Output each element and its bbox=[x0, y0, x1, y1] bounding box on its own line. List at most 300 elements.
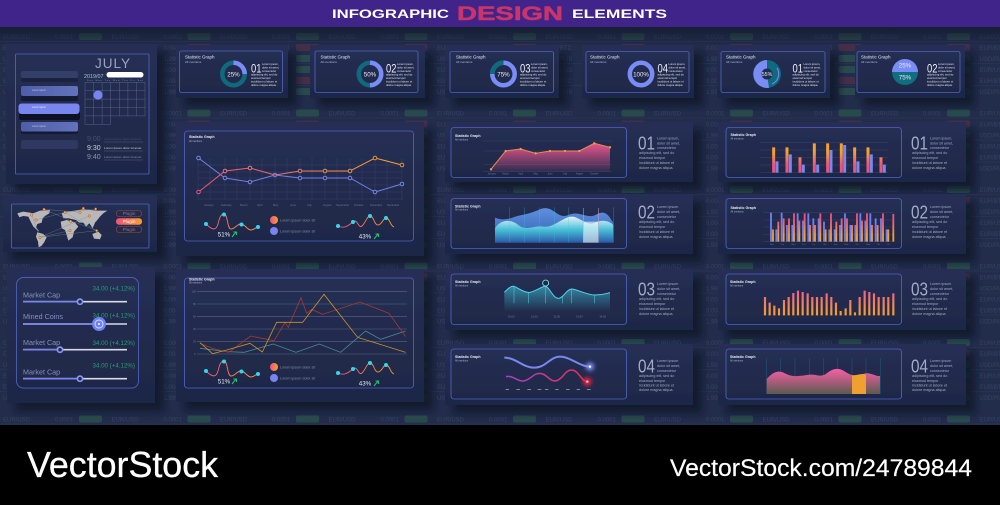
chart title bbox=[730, 280, 756, 288]
card number and copy: consectetur bbox=[397, 69, 411, 73]
panel number and copy: dolore magna aliqua. bbox=[912, 166, 946, 170]
stat card 100 percent bbox=[582, 45, 694, 98]
sparkline right bbox=[336, 214, 394, 228]
slider: mined coins bbox=[23, 312, 135, 331]
panel number and copy: adipiscing elit, sed do bbox=[639, 297, 674, 301]
panel: cyan line chart 03 bbox=[445, 269, 693, 330]
card number and copy: eiusmod tempor bbox=[386, 76, 406, 80]
calendar grid bbox=[85, 79, 145, 124]
card number and copy: 01 bbox=[792, 64, 803, 76]
panel number and copy: adipiscing elit, sed do bbox=[912, 151, 947, 155]
grid and y axis: 100 bbox=[192, 290, 196, 294]
panel number and copy: eiusmod tempor bbox=[639, 156, 666, 160]
grid and y axis: 20 bbox=[193, 340, 196, 344]
panel number and copy: eiusmod tempor bbox=[912, 156, 939, 160]
schedule times: Lorem ipsum dolor sit amet bbox=[104, 155, 141, 159]
panel number and copy: Lorem ipsum bbox=[657, 359, 678, 363]
panel number and copy: adipiscing elit, sed do bbox=[639, 220, 674, 224]
dense bars: Mon bbox=[770, 244, 774, 246]
card number and copy: consectetur bbox=[668, 69, 683, 73]
card number and copy: dolore magna aliqua. bbox=[520, 83, 546, 87]
dense bars: Tue bbox=[781, 244, 785, 246]
chart title: Statistic Graph bbox=[189, 135, 215, 139]
chart title: Statistic Graph bbox=[189, 278, 215, 282]
card number and copy: eiusmod tempor bbox=[520, 76, 540, 80]
panel number and copy: dolor sit amet, bbox=[930, 287, 953, 291]
panel number and copy: 03 bbox=[911, 280, 928, 300]
month axis labels: January bbox=[204, 203, 214, 207]
title: infographic: INFOGRAPHIC bbox=[332, 7, 449, 21]
cyan chart: 12:00 bbox=[553, 314, 560, 318]
list button 2 bbox=[21, 86, 78, 101]
percent 43 bbox=[359, 380, 378, 388]
panel: bar chart 03 bbox=[718, 269, 966, 330]
card number and copy: 01 bbox=[251, 64, 262, 76]
percent 51 bbox=[218, 378, 236, 386]
glow waves bbox=[504, 357, 594, 389]
chart title: Statistic Graph bbox=[455, 355, 481, 359]
percent 43: 43% bbox=[359, 380, 372, 388]
panel number and copy bbox=[911, 356, 953, 392]
panel number and copy: consectetur bbox=[657, 146, 677, 150]
card heading bbox=[456, 54, 486, 64]
card number and copy: 04 bbox=[658, 64, 668, 76]
panel number and copy: Lorem ipsum bbox=[930, 359, 951, 363]
card number and copy: incididunt ut labore et bbox=[386, 80, 412, 84]
panel number and copy: adipiscing elit, sed do bbox=[912, 374, 947, 378]
card number and copy: incididunt ut labore et bbox=[520, 80, 546, 84]
area chart: May bbox=[533, 173, 539, 175]
panel number and copy: dolor sit amet, bbox=[930, 364, 953, 368]
card heading: Statistic Graph bbox=[320, 54, 351, 60]
plugin buttons: Plugin bbox=[123, 227, 136, 232]
area chart: January bbox=[488, 172, 497, 175]
panel: area chart 01 bbox=[445, 122, 693, 182]
card heading: Statistic Graph bbox=[861, 54, 891, 60]
panel number and copy: incididunt ut labore et bbox=[912, 230, 947, 234]
chart title: All mentions bbox=[455, 208, 469, 212]
panel number and copy: incididunt ut labore et bbox=[639, 384, 674, 388]
month axis labels: September bbox=[336, 203, 349, 207]
cyan chart: 14:00 bbox=[599, 314, 606, 318]
grid and y axis: 60 bbox=[193, 314, 196, 318]
legend: Lorem ipsum dolor sit bbox=[280, 376, 315, 380]
sparkline left bbox=[204, 212, 260, 230]
stat card pie 55 percent bbox=[717, 45, 830, 98]
area chart bbox=[483, 141, 612, 175]
legend: Lorem ipsum dolor sit bbox=[280, 230, 315, 234]
schedule times: 9:30 bbox=[87, 145, 101, 152]
chart title: All mentions bbox=[730, 284, 744, 288]
legend bbox=[270, 216, 315, 235]
donut 25: 25% bbox=[227, 72, 240, 78]
card number and copy: incididunt ut labore et bbox=[251, 80, 277, 84]
list button 1 bbox=[21, 71, 78, 82]
panel number and copy bbox=[638, 356, 680, 392]
card heading: All mentions bbox=[185, 60, 202, 64]
panel number and copy: 01 bbox=[638, 134, 655, 154]
stat card 75 percent bbox=[445, 45, 559, 98]
card number and copy: dolor sit amet, bbox=[668, 66, 686, 70]
line chart grid bbox=[198, 158, 402, 200]
dense bars: Mon bbox=[845, 244, 849, 246]
header band bbox=[0, 0, 1000, 27]
card number and copy: 02 bbox=[927, 64, 938, 76]
list button 4: Lorem ipsum bbox=[32, 125, 46, 128]
card heading bbox=[726, 54, 756, 64]
panel number and copy: incididunt ut labore et bbox=[912, 384, 947, 388]
card number and copy: Lorem ipsum, bbox=[804, 62, 820, 66]
card number and copy: eiusmod tempor bbox=[251, 76, 271, 80]
percent 43: 43% bbox=[359, 234, 372, 240]
card number and copy: 03 bbox=[520, 64, 530, 76]
panel: sliders bbox=[7, 267, 155, 403]
panel number and copy: eiusmod tempor bbox=[912, 225, 939, 229]
calendar selected day bbox=[93, 90, 103, 100]
list button 3 active bbox=[18, 104, 80, 120]
area chart: August bbox=[576, 172, 583, 175]
panel number and copy: 04 bbox=[638, 356, 655, 376]
panel number and copy bbox=[638, 202, 680, 239]
chart title bbox=[455, 280, 481, 288]
chart title: Statistic Graph bbox=[730, 280, 756, 284]
chart title bbox=[730, 133, 756, 140]
panel number and copy: 02 bbox=[911, 202, 928, 222]
wave chart bbox=[495, 207, 613, 243]
card number and copy: adipiscing elit, sed do bbox=[927, 72, 954, 76]
cyan chart bbox=[504, 280, 610, 318]
schedule times: 9:40 bbox=[87, 154, 101, 161]
month axis labels: May bbox=[273, 203, 279, 207]
panel number and copy: incididunt ut labore et bbox=[912, 161, 947, 165]
card number and copy: consectetur bbox=[531, 69, 545, 73]
pink orange series bbox=[197, 156, 404, 194]
card number and copy bbox=[251, 62, 280, 87]
panel number and copy: incididunt ut labore et bbox=[639, 230, 674, 234]
panel: world map bbox=[3, 195, 157, 252]
panel number and copy: eiusmod tempor bbox=[639, 225, 666, 229]
month axis labels bbox=[204, 203, 400, 207]
panel: pink area chart 04 bbox=[718, 344, 966, 405]
panel number and copy: incididunt ut labore et bbox=[639, 161, 674, 165]
card number and copy: Lorem ipsum, bbox=[262, 62, 279, 66]
chart title: All mentions bbox=[455, 284, 469, 288]
sparkline left bbox=[204, 360, 260, 377]
month axis labels: March bbox=[240, 203, 248, 207]
card number and copy: Lorem ipsum, bbox=[668, 62, 685, 66]
card number and copy: adipiscing elit, sed do bbox=[658, 72, 684, 76]
card number and copy: adipiscing elit, sed do bbox=[386, 72, 413, 76]
panel: bar chart 02 bbox=[718, 194, 966, 254]
pink area chart bbox=[767, 358, 881, 394]
panel number and copy: consectetur bbox=[930, 146, 950, 150]
panel number and copy: dolor sit amet, bbox=[930, 141, 953, 145]
month axis labels: August bbox=[323, 203, 332, 207]
slider: mined coins: Mined Coins bbox=[23, 312, 63, 321]
schedule times: Lorem ipsum dolor sit amet bbox=[104, 146, 141, 150]
panel: calendar bbox=[6, 44, 157, 184]
slider: market cap 2 bbox=[23, 338, 135, 352]
area chart: July bbox=[563, 173, 568, 175]
area chart: October bbox=[590, 172, 599, 175]
dense bars: Sat bbox=[823, 243, 827, 246]
chart title bbox=[730, 206, 756, 214]
cyan chart: 10:00 bbox=[508, 314, 515, 318]
list button 3 active: Lorem ipsum bbox=[32, 106, 46, 109]
panel number and copy: consectetur bbox=[930, 369, 950, 373]
list button 2: Lorem ipsum bbox=[32, 89, 46, 92]
calendar date and search bbox=[84, 72, 144, 80]
card number and copy: eiusmod tempor bbox=[927, 76, 947, 80]
card number and copy: dolore magna aliqua. bbox=[927, 83, 953, 87]
list button 4 bbox=[21, 122, 78, 134]
footer brand: VectorStock bbox=[27, 444, 219, 485]
month axis labels: February bbox=[221, 203, 232, 207]
panel number and copy: dolore magna aliqua. bbox=[912, 235, 946, 239]
card number and copy: adipiscing elit, sed do bbox=[792, 72, 819, 76]
card number and copy: dolore magna aliqua. bbox=[658, 83, 683, 87]
panel: line chart months bbox=[176, 122, 424, 256]
grid and y axis: 80 bbox=[193, 302, 196, 306]
grid and y axis: 0 bbox=[194, 352, 196, 356]
slider: market cap 1 bbox=[23, 286, 135, 304]
top shading bbox=[0, 27, 1000, 45]
card number and copy: adipiscing elit, sed do bbox=[520, 72, 547, 76]
area chart: April bbox=[518, 172, 523, 175]
chart title: Statistic Graph bbox=[455, 204, 481, 208]
card number and copy: adipiscing elit, sed do bbox=[251, 72, 278, 76]
panel number and copy: adipiscing elit, sed do bbox=[639, 151, 674, 155]
legend bbox=[270, 363, 315, 382]
panel number and copy: eiusmod tempor bbox=[639, 379, 666, 383]
dense bars: Thu bbox=[802, 244, 805, 246]
chart title: All mentions bbox=[730, 138, 744, 140]
month axis labels: June bbox=[290, 203, 296, 207]
panel number and copy: dolore magna aliqua. bbox=[912, 312, 946, 316]
card number and copy bbox=[386, 62, 415, 87]
panel number and copy: consectetur bbox=[657, 215, 677, 219]
panel number and copy: 01 bbox=[911, 134, 928, 154]
chart title: All mentions bbox=[730, 210, 744, 214]
month axis labels: October bbox=[354, 203, 364, 207]
slider: market cap 2: 34.00 (+4.12%) bbox=[93, 340, 135, 347]
panel number and copy: dolor sit amet, bbox=[657, 210, 680, 214]
panel number and copy bbox=[911, 134, 953, 170]
chart title bbox=[455, 134, 481, 142]
donut 50: 50% bbox=[364, 72, 377, 78]
card number and copy bbox=[792, 62, 821, 87]
slider: market cap 1: Market Cap bbox=[23, 290, 60, 300]
world map bbox=[17, 207, 107, 247]
card heading bbox=[185, 54, 215, 64]
chart title bbox=[189, 278, 215, 284]
panel number and copy: dolore magna aliqua. bbox=[639, 312, 673, 316]
list button 5 bbox=[21, 140, 78, 149]
card heading: Statistic Graph bbox=[726, 54, 756, 60]
card number and copy: 02 bbox=[386, 64, 396, 76]
month axis labels: July bbox=[307, 203, 312, 207]
panel number and copy: Lorem ipsum bbox=[930, 282, 951, 286]
card heading: All mentions bbox=[320, 60, 337, 64]
card heading: All mentions bbox=[726, 60, 743, 64]
legend: Lorem ipsum dolor sit bbox=[280, 366, 315, 370]
footer band bbox=[0, 425, 1000, 505]
card number and copy: Lorem ipsum, bbox=[397, 62, 414, 66]
dense bars: Thu bbox=[877, 244, 880, 246]
panel number and copy: Lorem ipsum bbox=[930, 205, 951, 209]
slider: market cap 3: 34.00 (+4.12%) bbox=[93, 362, 135, 370]
card number and copy: incididunt ut labore et bbox=[792, 80, 819, 84]
card number and copy: dolore magna aliqua. bbox=[386, 83, 412, 87]
panel number and copy: adipiscing elit, sed do bbox=[912, 220, 947, 224]
panel number and copy: dolore magna aliqua. bbox=[639, 235, 673, 239]
card heading: All mentions bbox=[590, 60, 607, 64]
stat card 25 percent bbox=[176, 45, 288, 98]
card number and copy: dolor sit amet, bbox=[804, 66, 821, 70]
three data series bbox=[200, 294, 406, 354]
slider: mined coins: 34.00 (+4.12%) bbox=[93, 312, 135, 320]
panel: glow waves chart 04 bbox=[445, 344, 693, 405]
chart title: All mentions bbox=[189, 140, 203, 143]
panel number and copy: dolor sit amet, bbox=[657, 287, 680, 291]
panel number and copy: dolor sit amet, bbox=[930, 210, 953, 214]
card number and copy: consectetur bbox=[804, 69, 818, 73]
card number and copy: Lorem ipsum, bbox=[531, 62, 548, 66]
dense bars: Fri bbox=[813, 243, 816, 246]
card number and copy: dolor sit amet, bbox=[531, 66, 549, 70]
schedule times: Lorem ipsum dolor sit amet bbox=[104, 137, 141, 141]
purple series bbox=[197, 156, 404, 194]
panel: multi line chart bbox=[176, 269, 424, 402]
panel number and copy: Lorem ipsum, bbox=[930, 136, 952, 140]
percent 51 bbox=[218, 232, 236, 238]
panel number and copy bbox=[638, 280, 680, 316]
grid and y axis: 40 bbox=[193, 327, 196, 331]
area chart: March bbox=[502, 172, 510, 175]
card number and copy: consectetur bbox=[262, 69, 276, 73]
panel number and copy: dolore magna aliqua. bbox=[639, 166, 673, 170]
card number and copy: eiusmod tempor bbox=[658, 76, 677, 80]
dense bars: Sun bbox=[834, 244, 838, 246]
chart title: All mentions bbox=[455, 360, 469, 362]
panel number and copy: consectetur bbox=[930, 292, 950, 296]
chart title: Statistic Graph bbox=[730, 133, 756, 137]
panel number and copy: 04 bbox=[911, 356, 928, 376]
panel: wave chart 02 bbox=[445, 194, 693, 254]
month axis labels: November bbox=[370, 203, 383, 207]
percent 51: 51% bbox=[218, 378, 231, 386]
chart title: Statistic Graph bbox=[455, 280, 481, 284]
stat card 50 percent bbox=[310, 45, 425, 98]
calendar grid: Sun Mon Tue Wed Thu Fri Sat bbox=[87, 79, 143, 82]
plugin buttons bbox=[116, 210, 142, 232]
card number and copy bbox=[658, 62, 686, 87]
calendar date and search: 2019/07 bbox=[84, 74, 104, 80]
slider: market cap 3 bbox=[23, 362, 135, 381]
percent 43 bbox=[359, 234, 378, 240]
panel number and copy: incididunt ut labore et bbox=[639, 307, 674, 311]
panel number and copy: dolor sit amet, bbox=[657, 364, 680, 368]
ticker background bbox=[0, 27, 1000, 425]
legend: Lorem ipsum dolor sit bbox=[280, 218, 315, 222]
panel number and copy bbox=[911, 280, 953, 316]
panel number and copy: incididunt ut labore et bbox=[912, 307, 947, 311]
card number and copy: dolor sit amet, bbox=[262, 66, 280, 70]
card number and copy: eiusmod tempor bbox=[792, 76, 812, 80]
card number and copy: consectetur bbox=[938, 69, 952, 73]
chart title: All mentions bbox=[730, 360, 744, 362]
title: design: DESIGN bbox=[457, 4, 563, 25]
card number and copy: dolore magna aliqua. bbox=[792, 83, 818, 87]
panel: bar chart 01 bbox=[718, 122, 966, 182]
panel number and copy bbox=[911, 202, 953, 239]
gradient bars bbox=[765, 291, 893, 315]
cyan chart: 11:00 bbox=[531, 314, 538, 318]
card number and copy: dolor sit amet, bbox=[397, 66, 415, 70]
panel number and copy: eiusmod tempor bbox=[912, 379, 939, 383]
panel number and copy: adipiscing elit, sed do bbox=[639, 374, 674, 378]
donut 100: 100% bbox=[633, 72, 649, 78]
panel number and copy: eiusmod tempor bbox=[912, 302, 939, 306]
month axis labels: December bbox=[387, 203, 400, 207]
card number and copy bbox=[927, 62, 956, 87]
panel number and copy bbox=[638, 134, 680, 170]
slider: market cap 3: Market Cap bbox=[23, 368, 60, 376]
chart title: Statistic Graph bbox=[730, 355, 756, 359]
card heading: Statistic Graph bbox=[185, 54, 215, 60]
split pie bbox=[892, 59, 918, 85]
slider: market cap 2: Market Cap bbox=[23, 338, 60, 347]
panel number and copy: consectetur bbox=[657, 292, 677, 296]
chart title bbox=[730, 355, 756, 362]
panel number and copy: Lorem ipsum bbox=[657, 282, 678, 286]
panel number and copy: consectetur bbox=[930, 215, 950, 219]
panel number and copy: 02 bbox=[638, 202, 655, 222]
card heading bbox=[320, 54, 351, 64]
schedule times: 9:00 bbox=[87, 136, 101, 143]
dense bars: Wed bbox=[791, 244, 795, 246]
chart title: All mentions bbox=[455, 138, 469, 142]
card number and copy: dolore magna aliqua. bbox=[251, 83, 277, 87]
chart title: Statistic Graph bbox=[730, 206, 756, 210]
panel number and copy: dolore magna aliqua. bbox=[639, 388, 673, 392]
panel number and copy: dolor sit amet, bbox=[657, 141, 680, 145]
grid and y axis bbox=[192, 290, 407, 356]
chart title bbox=[189, 135, 215, 143]
month axis labels: April bbox=[257, 203, 263, 207]
chart title bbox=[455, 204, 481, 212]
stat card split pie bbox=[855, 45, 965, 98]
card number and copy: dolor sit amet, bbox=[938, 66, 956, 70]
card number and copy: Lorem ipsum, bbox=[938, 62, 955, 66]
area chart: June bbox=[547, 173, 553, 175]
panel number and copy: 03 bbox=[638, 280, 655, 300]
card heading: All mentions bbox=[861, 60, 878, 64]
split pie: 25% bbox=[899, 62, 912, 70]
sparkline right bbox=[336, 361, 394, 375]
card number and copy: incididunt ut labore et bbox=[927, 80, 953, 84]
dense bars: Fri bbox=[887, 243, 890, 246]
panel number and copy: eiusmod tempor bbox=[639, 302, 666, 306]
chart title bbox=[455, 355, 481, 362]
split pie: 75% bbox=[899, 74, 912, 82]
dense bars: Wed bbox=[866, 244, 870, 246]
card heading bbox=[861, 54, 891, 64]
title: elements: ELEMENTS bbox=[572, 7, 667, 21]
card number and copy bbox=[520, 62, 549, 87]
paired bars bbox=[760, 143, 888, 173]
card heading: All mentions bbox=[456, 60, 473, 64]
